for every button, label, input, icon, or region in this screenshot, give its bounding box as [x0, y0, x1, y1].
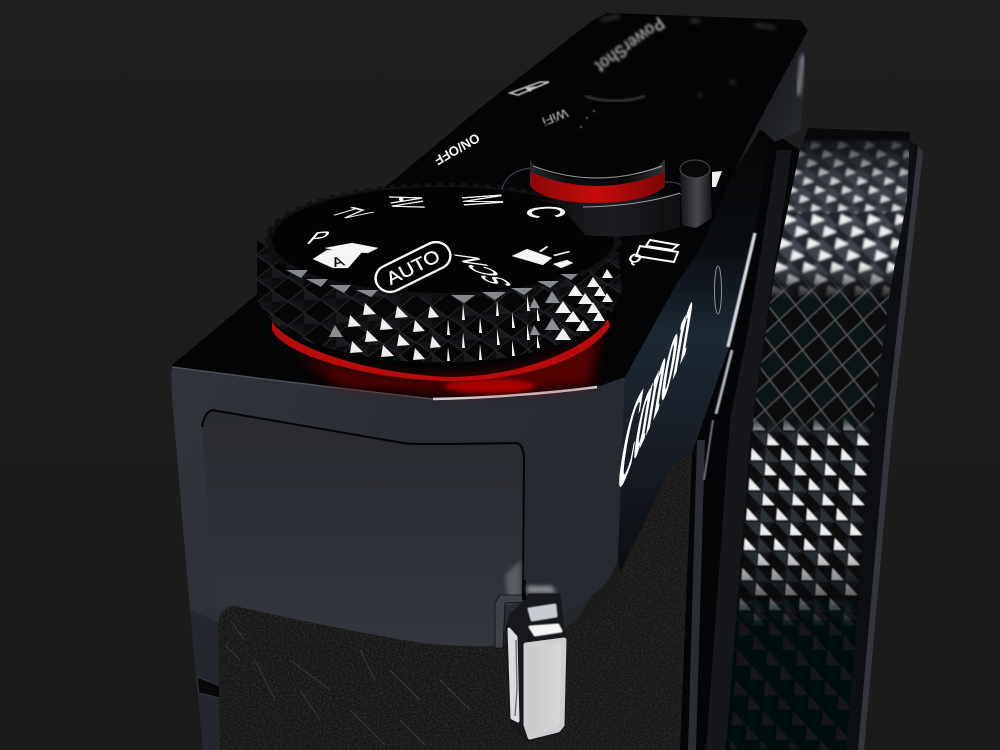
label ON/OFF: ON/OFF [432, 130, 482, 168]
rear blurred dial arc [585, 96, 645, 101]
navy side panel [618, 130, 770, 573]
leather grip left [218, 606, 500, 750]
label SCN: SCN [446, 252, 522, 288]
lens inner grey strip [705, 150, 792, 750]
door corner sheen [505, 560, 521, 604]
dial labels [301, 193, 575, 297]
label P: P [301, 228, 335, 248]
latch [495, 580, 565, 740]
shutter rim highlight [533, 166, 662, 178]
icon: movie auto [313, 243, 378, 270]
label AUTO pill [371, 237, 455, 297]
side oval button [714, 266, 722, 314]
dial knurled side [257, 240, 622, 362]
dial top face [272, 187, 614, 293]
label Tv: TV [322, 205, 381, 222]
latch dark chrome body [507, 596, 565, 740]
front teeth [286, 270, 578, 303]
Canon logo: Canon [613, 251, 701, 522]
red ring reflection [285, 335, 600, 392]
base ring outline [502, 168, 683, 195]
latch frame [495, 595, 523, 648]
zoom ring highlight [583, 193, 680, 207]
shutter red band [530, 170, 665, 203]
red ring glow [445, 379, 535, 393]
label AUTO pill: AUTO [382, 245, 444, 289]
side clip [197, 677, 220, 698]
label PowerShot: PowerShot [591, 13, 668, 77]
shutter top [530, 134, 664, 180]
icon: zoom wide tele [624, 240, 678, 267]
label C: C [514, 205, 575, 219]
lens knurling [726, 128, 910, 750]
zoom ring [503, 192, 680, 236]
lens barrel black band [680, 130, 800, 750]
lens outer dark rim [846, 138, 918, 750]
latch bevel shadow [515, 640, 517, 716]
icon: video camera [512, 246, 573, 268]
lens rim highlight [858, 146, 923, 750]
shutter cylinder [530, 160, 665, 186]
icon: playback button [510, 82, 549, 95]
illustration: camera close-up [170, 13, 923, 750]
grey pyramids [329, 291, 560, 337]
front panel brushed metal [172, 367, 625, 640]
camera left side edge [170, 372, 625, 750]
red ring [272, 318, 610, 381]
lever top [680, 160, 710, 178]
leather grip right [495, 450, 700, 750]
latch top highlight [529, 605, 556, 620]
latch left bevel [509, 629, 518, 721]
lens outer grey strip [688, 440, 705, 750]
lens ring [680, 120, 930, 750]
mode dial [250, 185, 630, 370]
white tick mark [712, 171, 722, 187]
label M: M [450, 193, 516, 207]
lower left body strip [190, 610, 220, 750]
shutter button assembly [502, 134, 722, 236]
label Av: AV [378, 194, 433, 210]
dial toothed top rim [267, 185, 619, 295]
zoom lever [680, 163, 712, 228]
latch sheen above [527, 586, 556, 593]
dots beside WiFi [580, 110, 595, 128]
latch stem [522, 580, 526, 600]
top plate [172, 13, 808, 400]
blurred top marks [601, 16, 775, 95]
white pyramid highlights left [348, 303, 441, 360]
latch silver face [526, 640, 564, 737]
label WiFi: WiFi [540, 106, 570, 128]
lens edge highlight [704, 233, 755, 480]
white pyramid highlights right [555, 269, 613, 340]
top edge chrome highlight [172, 367, 597, 399]
icon: movie auto: A [329, 254, 348, 270]
latch middle highlight [530, 625, 561, 635]
battery door [202, 410, 524, 646]
top right facet [757, 33, 810, 142]
white pyramid slivers centre [447, 295, 540, 361]
icon: zoom wide tele: Q [624, 251, 645, 267]
leather scratches [225, 620, 470, 745]
